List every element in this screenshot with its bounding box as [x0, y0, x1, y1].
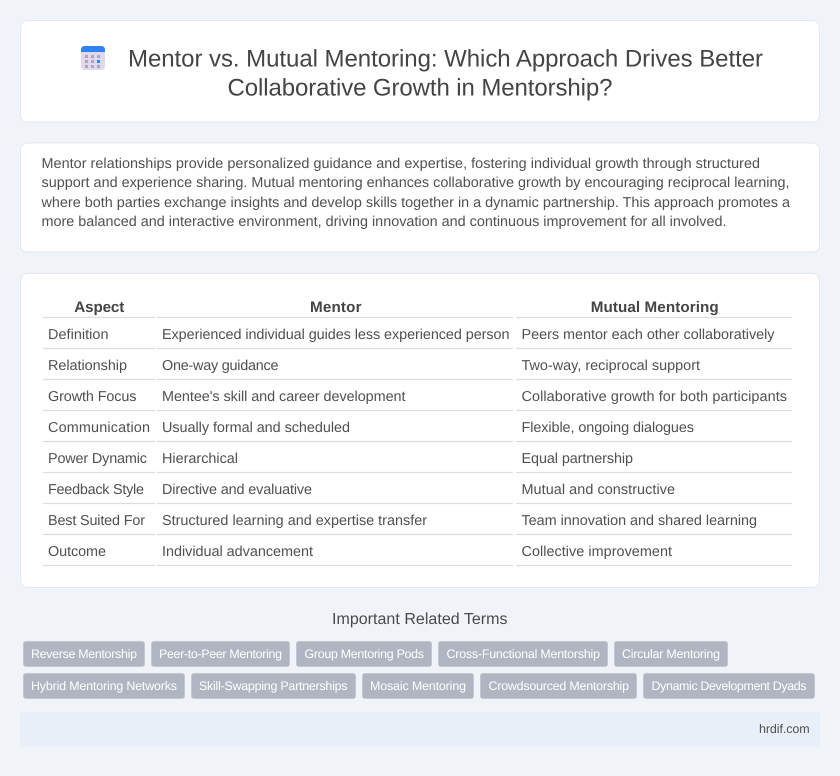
column: mentor: Hierarchical [162, 451, 238, 467]
panel: comparison table [20, 274, 820, 588]
column: mutual mentoring: Collective improvement [522, 544, 672, 560]
column: mutual mentoring: Team innovation and shared learning [522, 513, 757, 529]
table grid lines [43, 318, 792, 566]
column: mentor: Experienced individual guides less experienced person [162, 327, 510, 343]
column: aspect [48, 327, 150, 560]
column: aspect: Definition [48, 327, 108, 343]
related term tags: Skill-Swapping Partnerships [199, 679, 348, 693]
column: aspect: Outcome [48, 544, 106, 560]
column: mentor: Individual advancement [162, 544, 313, 560]
table header: Aspect [74, 299, 124, 316]
related term tags: Mosaic Mentoring [370, 679, 466, 693]
column: mentor: Directive and evaluative [162, 482, 312, 498]
table header: Mentor [310, 299, 362, 316]
column: aspect: Relationship [48, 358, 127, 374]
column: aspect: Communication [48, 420, 150, 436]
related term tags: Peer-to-Peer Mentoring [159, 647, 282, 661]
column: mentor: Structured learning and expertise transfer [162, 513, 427, 529]
column: aspect: Growth Focus [48, 389, 136, 405]
title: Collaborative Growth in Mentorship? [228, 74, 612, 102]
column: aspect: Feedback Style [48, 482, 144, 498]
related term tags: Group Mentoring Pods [304, 647, 424, 661]
column: mutual mentoring [522, 327, 787, 560]
footer [20, 712, 820, 746]
related term tags: Cross-Functional Mentorship [446, 647, 600, 661]
description text: more balanced and interactive environment, driving innovation and continuous improvement for all involved. [42, 214, 726, 230]
related term tags: Dynamic Development Dyads [652, 679, 806, 693]
column: mentor: Usually formal and scheduled [162, 420, 350, 436]
column: mutual mentoring: Flexible, ongoing dialogues [522, 420, 694, 436]
description text: Mentor relationships provide personalized guidance and expertise, fostering individual growth through structured [42, 156, 760, 172]
description text [40, 156, 790, 230]
description text: support and experience sharing. Mutual mentoring enhances collaborative growth by encouraging reciprocal learning, [42, 175, 790, 191]
column: mutual mentoring: Two-way, reciprocal support [522, 358, 700, 374]
panel: header [20, 20, 820, 122]
related term tags: Reverse Mentorship [31, 647, 137, 661]
icon: calendar [81, 46, 105, 70]
related term tags: Circular Mentoring [622, 647, 720, 661]
table header [74, 299, 719, 316]
column: mentor [162, 327, 510, 560]
title: Mentor vs. Mutual Mentoring: Which Approach Drives Better [128, 46, 763, 72]
column: mentor: Mentee's skill and career development [162, 389, 406, 405]
column: aspect: Power Dynamic [48, 451, 147, 467]
column: mutual mentoring: Mutual and constructive [522, 482, 675, 498]
column: mutual mentoring: Collaborative growth for both participants [522, 389, 787, 405]
panel: description [20, 143, 820, 252]
related term tags [24, 642, 814, 698]
column: mutual mentoring: Equal partnership [522, 451, 633, 467]
footer: hrdif.com [759, 722, 810, 736]
heading: related terms: Important Related Terms [332, 611, 508, 628]
column: aspect: Best Suited For [48, 513, 145, 529]
description text: where both parties exchange insights and develop skills together in a dynamic partnership. This approach promotes a [40, 195, 790, 211]
column: mentor: One-way guidance [162, 358, 278, 374]
column: mutual mentoring: Peers mentor each other collaboratively [522, 327, 775, 343]
related term tags: Crowdsourced Mentorship [488, 679, 629, 693]
table header: Mutual Mentoring [591, 299, 719, 316]
related term tags: Hybrid Mentoring Networks [31, 679, 177, 693]
title [128, 46, 763, 102]
